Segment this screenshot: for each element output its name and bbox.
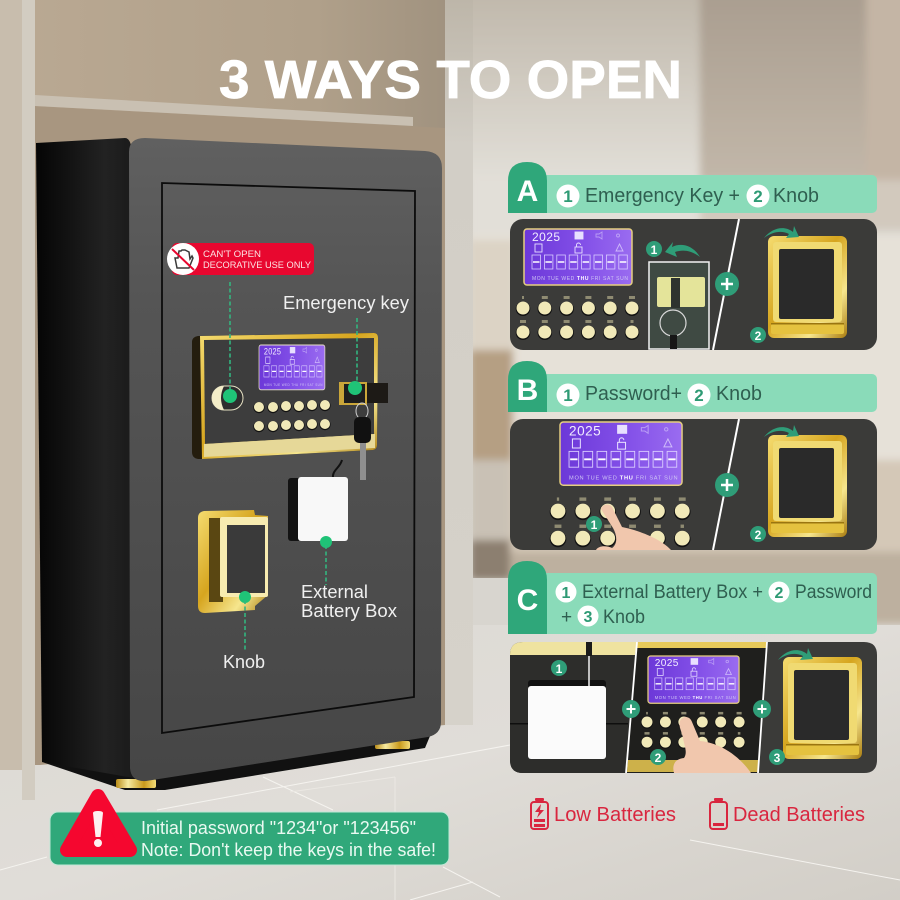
- method B header: [508, 361, 877, 412]
- display: 2025: [655, 658, 679, 669]
- fingerprint knob pill: [212, 386, 243, 410]
- lock display: MON TUE WED THU FRI SAT SUN: [264, 382, 323, 387]
- method C header: Knob: [603, 607, 645, 628]
- method A header: A: [517, 175, 538, 208]
- method A header: Emergency Key +: [585, 185, 740, 207]
- background: right side room: [455, 0, 900, 624]
- lock keypad: [253, 400, 331, 432]
- warning label: can't open: DECORATIVE USE ONLY: [203, 260, 312, 271]
- plus icon left: [622, 700, 640, 718]
- lock display: 2025: [264, 346, 281, 357]
- plus icon right: [753, 700, 771, 718]
- key slot and key: [339, 381, 388, 480]
- knob: [768, 435, 847, 537]
- knob arrow: [778, 648, 813, 660]
- label: external battery box: Battery Box: [301, 601, 397, 621]
- display: MON TUE WED THU FRI SAT SUN: [532, 276, 628, 282]
- method A header: [508, 162, 877, 213]
- battery wire: [333, 460, 342, 478]
- method B header: 1: [563, 386, 573, 405]
- step 1 badge: 1: [556, 662, 563, 676]
- password note banner: Initial password "1234"or "123456": [141, 818, 416, 838]
- knob arrow: [764, 226, 799, 238]
- method C header: C: [517, 584, 538, 617]
- warning label: can't open: CAN'T OPEN: [203, 249, 261, 260]
- step 1 badge: 1: [591, 518, 598, 532]
- step 1 badge and arrow: [646, 241, 700, 257]
- method A header: 2: [753, 187, 763, 206]
- method B header: 2: [694, 386, 704, 405]
- warning label: can't open: [167, 243, 314, 275]
- label: emergency key: Emergency key: [283, 292, 410, 313]
- step 2 badge: 2: [755, 329, 762, 343]
- step 2 badge: 2: [755, 528, 762, 542]
- step 1 badge: [586, 516, 602, 532]
- plus icon: [715, 473, 739, 497]
- label: external battery box: [301, 582, 397, 621]
- method C header: 1: [562, 585, 571, 602]
- method A panel: [510, 219, 877, 350]
- step 2 badge: 2: [655, 751, 662, 765]
- method C header: [508, 561, 877, 634]
- title: 3 WAYS TO OPEN: [219, 50, 682, 110]
- method C header: Password: [795, 582, 872, 603]
- knob arrow: [764, 425, 799, 437]
- dead batteries indicator: [710, 798, 865, 829]
- label: knob: Knob: [223, 652, 265, 672]
- icon: warning triangle: [67, 796, 130, 850]
- method C panel: [510, 642, 877, 773]
- low batteries indicator: Low Batteries: [554, 804, 676, 826]
- lock display: [259, 345, 325, 390]
- step 1 badge and arrow: 1: [651, 243, 658, 257]
- step 2 badge: [650, 749, 666, 765]
- display: [648, 656, 739, 703]
- dead batteries indicator: Dead Batteries: [733, 804, 865, 826]
- method B panel: [510, 419, 877, 550]
- display: [560, 422, 682, 485]
- step 2 badge: [750, 327, 766, 343]
- display: [524, 229, 632, 285]
- knob: [768, 236, 847, 338]
- label: external battery box: External: [301, 582, 368, 602]
- method A header: 1: [563, 187, 573, 206]
- display: MON TUE WED THU FRI SAT SUN: [655, 695, 736, 700]
- external battery box: [288, 477, 348, 548]
- method B header: Password+: [585, 383, 682, 405]
- pressing hand: [596, 504, 671, 550]
- callout leader lines: [230, 282, 357, 650]
- safe feet: [116, 741, 410, 788]
- keypad: [641, 712, 745, 749]
- battery section: [510, 642, 637, 773]
- method C header: +: [561, 607, 572, 628]
- password note banner: [50, 796, 449, 865]
- electronic lock panel: [192, 333, 388, 480]
- method C header: External Battery Box +: [582, 582, 763, 603]
- display: 2025: [569, 424, 601, 439]
- keypad: [550, 497, 691, 547]
- keypad: [516, 296, 639, 340]
- step 3 badge: 3: [774, 751, 781, 765]
- safe body: [36, 138, 442, 790]
- display: 2025: [532, 230, 560, 244]
- icon: no hand: [167, 243, 199, 275]
- method A header: Knob: [773, 185, 819, 207]
- password note banner: Note: Don't keep the keys in the safe!: [141, 840, 436, 860]
- method C header: 3: [584, 609, 593, 626]
- knob: [783, 657, 862, 759]
- display: MON TUE WED THU FRI SAT SUN: [569, 476, 678, 482]
- pressing hand: [673, 717, 751, 773]
- step 2 badge: [750, 526, 766, 542]
- plus icon: [715, 272, 739, 296]
- method B header: B: [517, 374, 538, 407]
- method C header: 2: [775, 585, 784, 602]
- low batteries indicator: [531, 798, 676, 829]
- password section: [626, 642, 767, 773]
- method B header: Knob: [716, 383, 762, 405]
- safe knob: [198, 510, 268, 613]
- icon: low battery: [531, 798, 548, 829]
- emergency key inset: [649, 262, 709, 349]
- step 3 badge: [769, 749, 785, 765]
- step 1 badge: [551, 660, 567, 676]
- icon: dead battery: [710, 798, 727, 829]
